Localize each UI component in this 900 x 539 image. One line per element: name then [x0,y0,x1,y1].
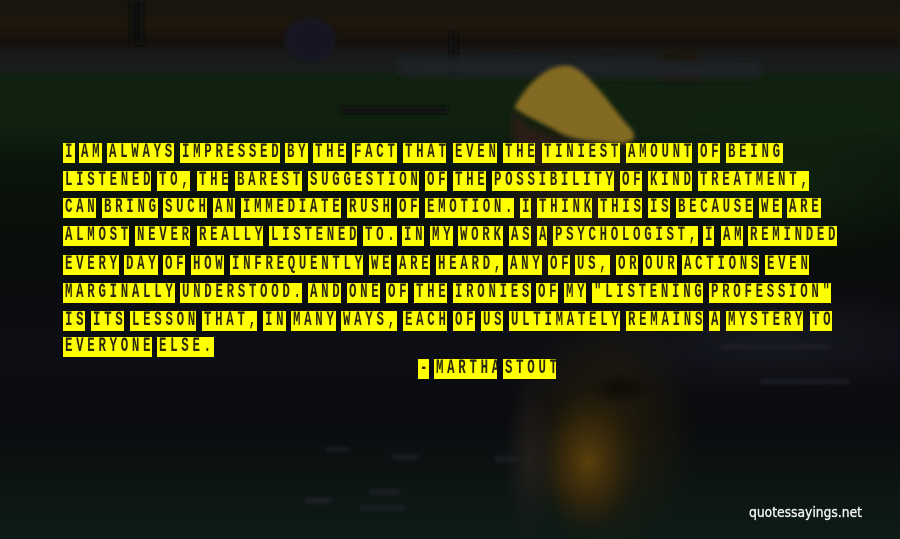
quote line 7 [63,311,832,331]
quote text block [63,143,837,379]
figure: yellow hood and body [498,66,658,300]
background objects: tree trunk and rock [130,0,700,113]
attribution: Martha Stout [418,359,556,379]
quote line 3 [63,198,821,218]
water highlights [305,345,850,510]
quote line 8 [63,337,214,357]
quote line 1 [63,143,783,163]
quote line 2 [63,171,809,191]
quote line 4 [63,226,837,246]
quote line 6 [63,283,831,303]
quote line 5 [63,255,809,275]
reflection of the figure in the water [504,305,700,539]
